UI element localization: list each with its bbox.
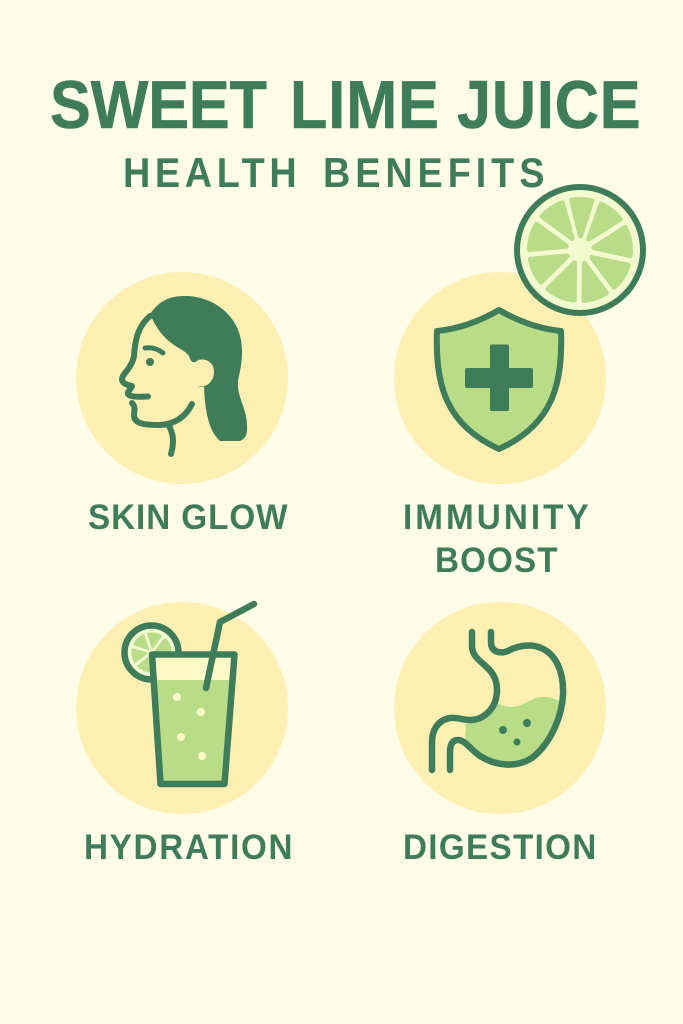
panel: digestion — [394, 602, 606, 867]
label: immunity boost — [403, 498, 589, 580]
panel: hydration — [76, 602, 293, 867]
label: immunity boost: IMMUNITY — [403, 498, 589, 537]
label: skin glow: SKIN GLOW — [88, 498, 288, 537]
title: LIME — [290, 66, 439, 143]
icon: stomach — [432, 632, 563, 770]
title: SWEET — [50, 66, 267, 143]
panel: skin glow — [76, 272, 288, 537]
icon: juice glass with lime and straw — [124, 604, 254, 784]
icon background: hydration — [76, 602, 288, 814]
subtitle: HEALTH — [123, 150, 297, 196]
icon: woman profile — [122, 296, 247, 454]
icon: lime slice — [517, 187, 643, 313]
label: digestion: DIGESTION — [403, 828, 596, 867]
icon: shield with cross — [437, 310, 561, 449]
subtitle: BENEFITS — [323, 150, 544, 196]
icon background: immunity boost — [394, 272, 606, 484]
icon background: digestion — [394, 602, 606, 814]
label: hydration: HYDRATION — [84, 828, 293, 867]
title: JUICE — [457, 66, 641, 143]
title — [50, 66, 641, 143]
label: immunity boost: BOOST — [435, 541, 558, 580]
panel: immunity boost — [394, 272, 606, 580]
subtitle — [123, 150, 544, 196]
icon background: skin glow — [76, 272, 288, 484]
